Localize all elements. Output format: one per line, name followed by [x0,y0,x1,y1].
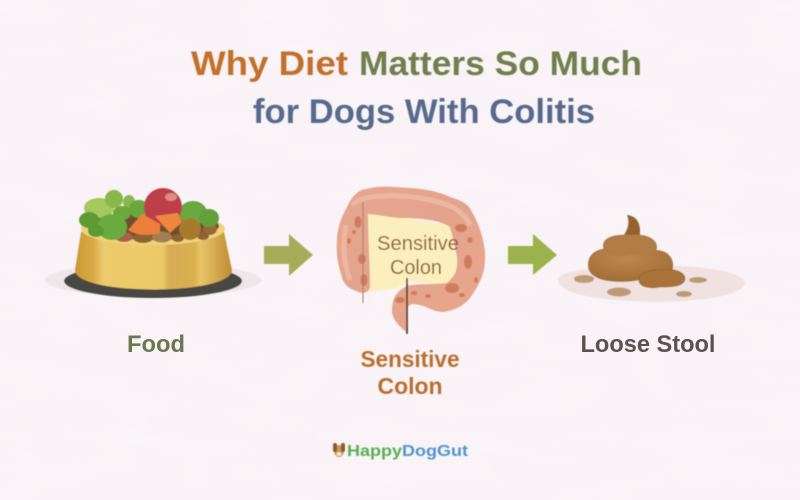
colon label [360,346,460,399]
bowl rim [81,213,225,245]
inner colon text: Sensitive [377,233,459,255]
icon: food bowl [45,188,261,298]
colon tube [337,187,485,333]
icon: colon [337,187,485,334]
colon label: Colon [378,373,442,399]
inner colon text [377,233,459,279]
stool pile [588,249,673,282]
kibble [115,223,217,243]
title: Matters So Much [359,45,642,83]
greens [79,190,219,240]
brown nuggets [179,218,201,240]
arrow 2 [508,234,557,275]
haustra spots [347,216,478,303]
bowl shadow [45,263,261,297]
logo text: Happy DogGut [347,443,468,460]
splats [574,275,594,283]
icon: stool [558,215,745,302]
pointer lines [362,202,364,303]
logo [333,443,468,460]
food label: Food [127,331,185,358]
title: for Dogs With Colitis [253,93,595,131]
carrots [128,214,160,235]
inner colon text: Colon [390,257,442,279]
bowl body [75,232,232,290]
stool tip [618,215,640,242]
apple [144,188,182,226]
icon: dog [333,443,345,457]
arrow 1 [264,234,313,276]
stool label: Loose Stool [580,331,716,358]
title [191,45,642,131]
colon label: Sensitive [360,346,460,372]
bowl base [64,264,242,298]
tube highlights [344,196,470,280]
title: Why Diet [191,45,348,83]
puddle [558,266,745,302]
colon background [368,213,458,292]
